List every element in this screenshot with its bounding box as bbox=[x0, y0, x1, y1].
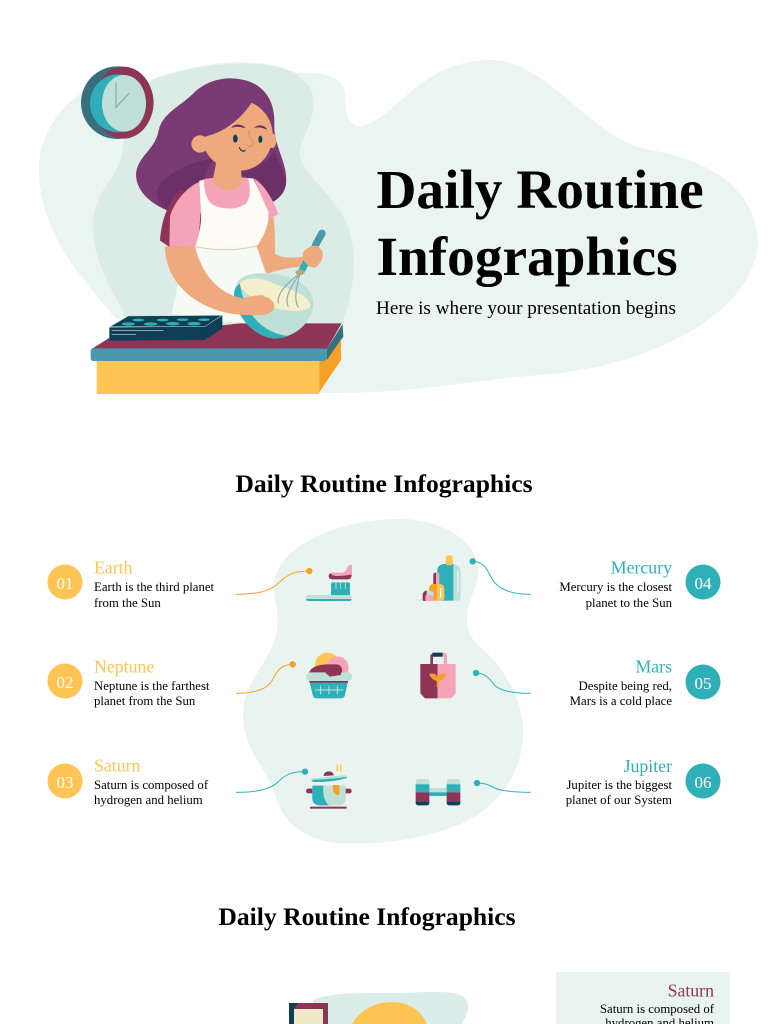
icon: tote bag bbox=[420, 653, 456, 698]
icon: dumbbell bbox=[416, 779, 460, 805]
illustration: woman baking in the kitchen bbox=[81, 66, 343, 394]
baking tray bbox=[109, 315, 222, 341]
woman figure bbox=[136, 78, 305, 323]
section heading 1: Daily Routine Infographics bbox=[235, 469, 533, 498]
item 02: neptune bbox=[48, 656, 210, 708]
item 05: mars: Mars is a cold place bbox=[570, 694, 672, 708]
item 06: jupiter: Jupiter is the biggest bbox=[566, 778, 672, 792]
bottom illustration bbox=[289, 992, 468, 1024]
item 03: saturn: Saturn is composed of bbox=[94, 778, 209, 792]
section heading 2: Daily Routine Infographics bbox=[218, 902, 516, 931]
subtitle: Here is where your presentation begins bbox=[376, 298, 676, 319]
panel: saturn: Saturn is composed of bbox=[600, 1002, 715, 1016]
item 01: earth: from the Sun bbox=[94, 596, 161, 610]
item 03: saturn: Saturn bbox=[94, 756, 141, 776]
item 02: neptune: 02 bbox=[56, 673, 74, 692]
item 04: mercury: planet to the Sun bbox=[586, 596, 673, 610]
item 05: mars bbox=[570, 656, 720, 708]
item 05: mars: Mars bbox=[635, 656, 672, 676]
title bbox=[376, 159, 704, 287]
item 01: earth: 01 bbox=[56, 574, 74, 593]
item 04: mercury: Mercury is the closest bbox=[559, 580, 672, 594]
item 04: mercury: 04 bbox=[694, 574, 712, 593]
item 03: saturn: 03 bbox=[56, 773, 74, 792]
mixing bowl and whisk bbox=[165, 233, 323, 338]
item 03: saturn: hydrogen and helium bbox=[94, 793, 203, 807]
center blob bbox=[243, 519, 523, 844]
item 02: neptune: planet from the Sun bbox=[94, 694, 196, 708]
icon: toothbrush bbox=[306, 565, 352, 601]
connector: earth bbox=[236, 568, 312, 594]
connector: jupiter bbox=[474, 780, 531, 792]
item 05: mars: Despite being red, bbox=[579, 679, 672, 693]
title: Infographics bbox=[376, 226, 678, 287]
counter bbox=[91, 323, 343, 394]
item 06: jupiter: Jupiter bbox=[624, 756, 672, 776]
title: Daily Routine bbox=[376, 159, 704, 220]
hero background blobs bbox=[39, 60, 758, 393]
icon: laundry basket bbox=[306, 653, 352, 698]
item 04: mercury bbox=[559, 558, 720, 610]
item 02: neptune: Neptune bbox=[94, 656, 154, 676]
item 06: jupiter: 06 bbox=[694, 773, 712, 792]
panel: saturn: Saturn bbox=[668, 980, 714, 1000]
connector: neptune bbox=[236, 661, 296, 693]
connector lines and icons bbox=[236, 555, 531, 809]
item 01: earth: Earth is the third planet bbox=[94, 580, 215, 594]
icon: cooking pot bbox=[306, 764, 352, 809]
item 06: jupiter bbox=[566, 756, 720, 807]
item 01: earth bbox=[48, 558, 215, 610]
panel: saturn bbox=[556, 972, 730, 1024]
icon: bottles bbox=[415, 555, 461, 601]
item 02: neptune: Neptune is the farthest bbox=[94, 679, 210, 693]
item 03: saturn bbox=[48, 756, 209, 807]
connector: mercury bbox=[469, 558, 531, 594]
connector: saturn bbox=[236, 768, 308, 792]
item 05: mars: 05 bbox=[694, 674, 712, 693]
item 06: jupiter: planet of our System bbox=[566, 793, 672, 807]
connector: mars bbox=[473, 670, 531, 693]
icon: wall clock bbox=[81, 66, 154, 139]
item 01: earth: Earth bbox=[94, 558, 133, 578]
item 04: mercury: Mercury bbox=[611, 558, 672, 578]
